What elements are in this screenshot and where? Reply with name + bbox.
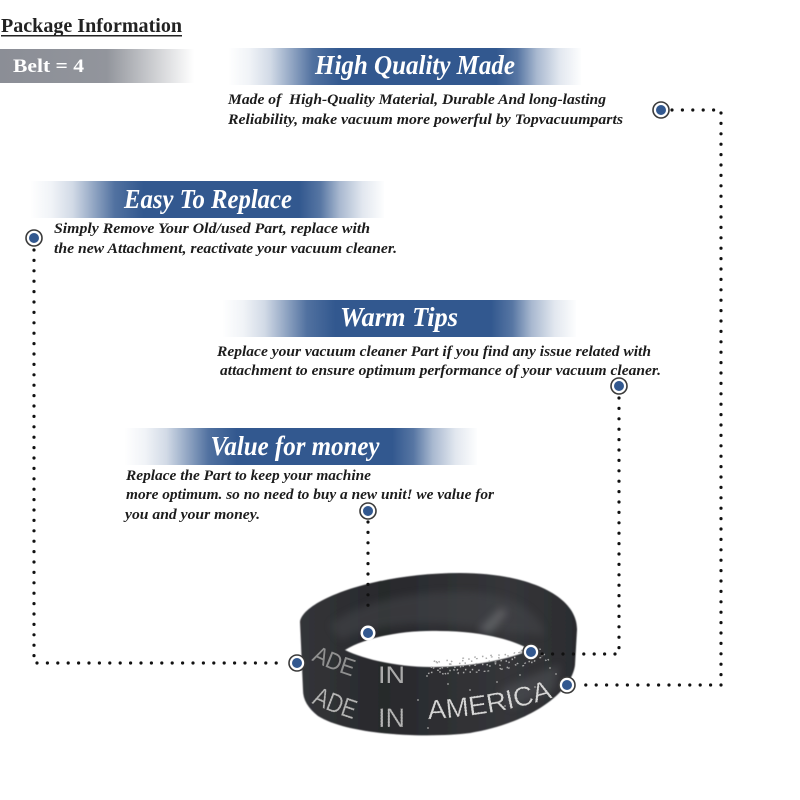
belt imprint: lower text: ADE bbox=[311, 688, 358, 719]
text: Warm Tips description bbox=[216, 344, 661, 379]
belt imprint: upper text: AMERICA bbox=[428, 648, 550, 675]
heading: High Quality Made: High Quality Made bbox=[314, 50, 515, 80]
belt imprint: lower text bbox=[311, 682, 553, 733]
marker: belt outer right bbox=[559, 677, 575, 693]
text: Value for money description: more optimum. so no need to buy a new unit! we value for bbox=[126, 487, 494, 503]
belt imprint: upper text bbox=[311, 648, 550, 689]
marker: belt left bbox=[289, 655, 305, 671]
heading: High Quality Made bbox=[228, 48, 581, 85]
panel: Easy To Replace bbox=[30, 181, 397, 257]
text: Warm Tips description: attachment to ensure optimum performance of your vacuum cleaner. bbox=[220, 363, 661, 379]
text: High Quality description bbox=[227, 92, 623, 128]
heading: Easy To Replace: Easy To Replace bbox=[123, 184, 292, 214]
marker: belt top bbox=[360, 626, 376, 640]
panel: Value for money bbox=[123, 428, 494, 523]
banner: Belt = 4: Belt = 4 bbox=[13, 56, 85, 77]
connector: Value for money to belt bbox=[366, 522, 370, 612]
text: Value for money description: Replace the Part to keep your machine bbox=[125, 468, 371, 484]
marker: Warm Tips bbox=[611, 378, 627, 394]
marker: Value for money bbox=[360, 503, 376, 519]
text: Value for money description bbox=[123, 468, 494, 523]
text: Easy To Replace description: Simply Remove Your Old/used Part, replace with bbox=[54, 221, 370, 237]
connector: High Quality to belt bbox=[578, 110, 721, 685]
banner: Belt = 4 bbox=[0, 49, 194, 83]
text: Easy To Replace description bbox=[54, 221, 397, 257]
belt photo bbox=[299, 572, 578, 736]
text: High Quality description: Reliability, make vacuum more powerful by Topvacuumparts bbox=[227, 112, 623, 128]
marker: Easy To Replace bbox=[26, 230, 42, 246]
marker: belt inner right bbox=[523, 644, 539, 660]
belt speckles bbox=[417, 667, 557, 729]
heading: Easy To Replace bbox=[30, 181, 384, 218]
heading: Value for money: Value for money bbox=[210, 431, 380, 461]
belt imprint: upper text: IN bbox=[378, 662, 405, 689]
belt imprint: lower text: AMERICA bbox=[428, 682, 553, 720]
text: Value for money description: you and your money. bbox=[123, 507, 260, 523]
heading: Warm Tips: Warm Tips bbox=[340, 302, 458, 332]
heading: Warm Tips bbox=[222, 300, 576, 337]
text: High Quality description: Made of High-Quality Material, Durable And long-lasting bbox=[227, 92, 607, 108]
panel: Warm Tips bbox=[216, 300, 661, 379]
belt imprint: lower text: IN bbox=[378, 703, 405, 733]
title: Package Information: Package Information bbox=[1, 15, 182, 37]
belt imprint: upper text: ADE bbox=[311, 648, 356, 676]
heading: Value for money bbox=[124, 428, 477, 465]
text: Easy To Replace description: the new Attachment, reactivate your vacuum cleaner. bbox=[54, 241, 397, 257]
connector: Warm Tips to belt bbox=[542, 398, 619, 654]
connector: Easy To Replace to belt bbox=[34, 250, 286, 663]
text: Warm Tips description: Replace your vacuum cleaner Part if you find any issue related with bbox=[216, 344, 651, 360]
panel: High Quality Made bbox=[227, 48, 623, 128]
marker: High Quality bbox=[653, 102, 669, 118]
